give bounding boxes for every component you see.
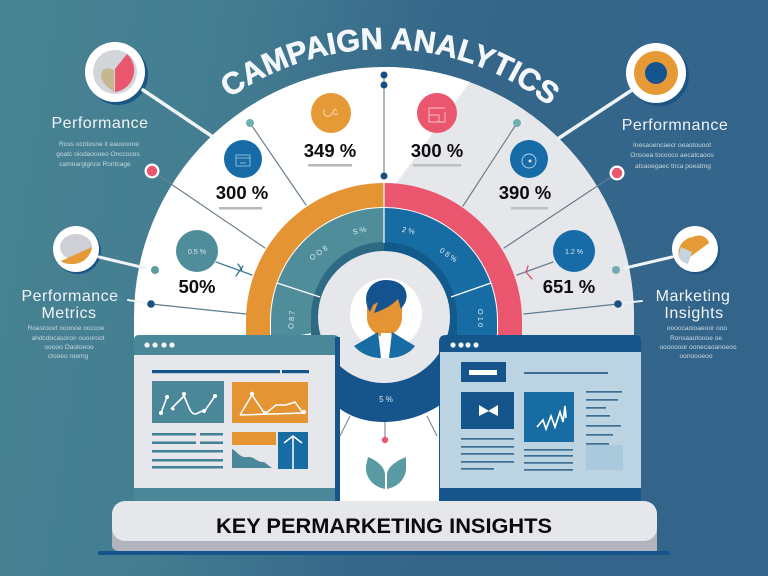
text block: Performance right: Performnance xyxy=(622,117,728,134)
chart: central radial gauge xyxy=(246,183,522,340)
icon: top-left pie badge xyxy=(85,42,148,105)
panel: lower dark blue band xyxy=(335,335,440,422)
text block: Performance right: atsaoegaec tnca poeatmg xyxy=(635,163,711,170)
text block: Performance right: Inesaoencaecr oeaotouoot xyxy=(633,142,711,149)
text block: Performance left: Ross ocntosne it eauooone xyxy=(59,141,139,148)
text block: Marketing Insights: Ronsaaotoooe oe xyxy=(670,335,722,342)
text block: Performance left: Performance xyxy=(51,115,149,132)
icon: top-right target badge xyxy=(626,43,689,106)
metric: 390%: 390 % xyxy=(499,182,551,203)
window dots xyxy=(144,342,175,348)
gauge labels: 2 % xyxy=(401,225,416,236)
icon: person avatar xyxy=(350,278,422,358)
text block: Performance Metrics xyxy=(21,288,119,360)
connector end dots xyxy=(144,72,624,308)
gauge dividers xyxy=(277,183,491,297)
text block: Performance left: camnarglgnce Rontcage xyxy=(59,161,131,168)
metric: 651% xyxy=(543,230,595,297)
text block: Marketing Insights: oonoooeoo xyxy=(679,353,713,360)
window dots xyxy=(450,342,479,348)
panel: semicircle dial background xyxy=(134,67,634,505)
text block: Performance left: goatc oiodaoooeo Onccoces xyxy=(56,151,140,158)
gauge labels: 0 8 % xyxy=(438,246,459,264)
metric: 390% xyxy=(499,140,551,210)
metric: 50%: 50% xyxy=(178,276,216,297)
gauge inner ring xyxy=(270,207,498,340)
text block: Performance Metrics: ctooeo roemg xyxy=(48,353,88,360)
text block: Marketing Insights: oooocaoioaeoor ooo xyxy=(667,325,727,332)
gauge labels: O 1 0 xyxy=(476,309,485,327)
inner gray disc xyxy=(318,251,450,383)
icon: leaf xyxy=(366,457,406,489)
panel: left dashboard screen xyxy=(134,335,340,501)
area chart xyxy=(232,449,272,468)
bowtie tile xyxy=(461,392,514,429)
metric: 349% xyxy=(304,93,356,166)
text block: Marketing Insights: ooooooor oonecaoanoeoo xyxy=(659,344,737,351)
metric: 651%: 651 % xyxy=(543,276,595,297)
metric: 50%: 0.5 % xyxy=(188,249,206,256)
metric: 50% xyxy=(176,230,218,297)
metric: 300% blue xyxy=(216,140,268,210)
text block: Performance Metrics: Performance xyxy=(21,288,119,305)
icon: left pie badge xyxy=(53,226,101,274)
metric: 300% red: 300 % xyxy=(411,140,463,161)
title: CAMPAIGN ANALYTICS xyxy=(222,28,558,104)
text block: Performance Metrics: Metrics xyxy=(41,305,97,322)
text block: Marketing Insights xyxy=(656,288,737,360)
text block: Marketing Insights: Insights xyxy=(664,305,724,322)
line chart tile xyxy=(524,392,574,442)
gauge labels: O O 8 xyxy=(308,244,329,262)
banner: key insights xyxy=(98,501,670,555)
panel: right document screen xyxy=(439,335,641,501)
metric: 651%: 1.2 % xyxy=(565,249,583,256)
text block: Performance left xyxy=(51,115,149,168)
metric: 300% red xyxy=(411,93,463,166)
teal line chart xyxy=(152,381,224,423)
text block: Performance Metrics: ahdcdocasoron ouooroot xyxy=(32,335,105,342)
connector lines xyxy=(99,72,672,314)
text block: Performance Metrics: Roasrocet ooonoe ooccoe xyxy=(28,325,105,332)
icon: right pie badge xyxy=(672,226,720,274)
gauge labels xyxy=(286,224,485,329)
icon: connector to leaf xyxy=(340,416,437,443)
orange line chart xyxy=(232,382,308,423)
banner: key insights: KEY PERMARKETING INSIGHTS xyxy=(216,514,552,538)
text lines xyxy=(152,433,223,468)
metric: 349%: 349 % xyxy=(304,140,356,161)
text block: Performance right xyxy=(622,117,728,170)
gauge labels: O 8 7 xyxy=(286,310,297,329)
metric: 300% blue: 300 % xyxy=(216,182,268,203)
blue up arrow tile xyxy=(278,432,308,469)
panel: lower dark blue band: 5 % xyxy=(379,395,393,404)
orange block xyxy=(232,432,276,445)
text lines xyxy=(461,391,622,471)
text block: Performance right: Onsoea tocooco aecatcaoos xyxy=(630,152,714,159)
gauge outer ring xyxy=(246,183,522,340)
text block: Performance Metrics: ooooo Oaotoeoo xyxy=(44,344,94,351)
gauge labels: S % xyxy=(352,224,367,237)
text block: Marketing Insights: Marketing xyxy=(656,288,730,305)
